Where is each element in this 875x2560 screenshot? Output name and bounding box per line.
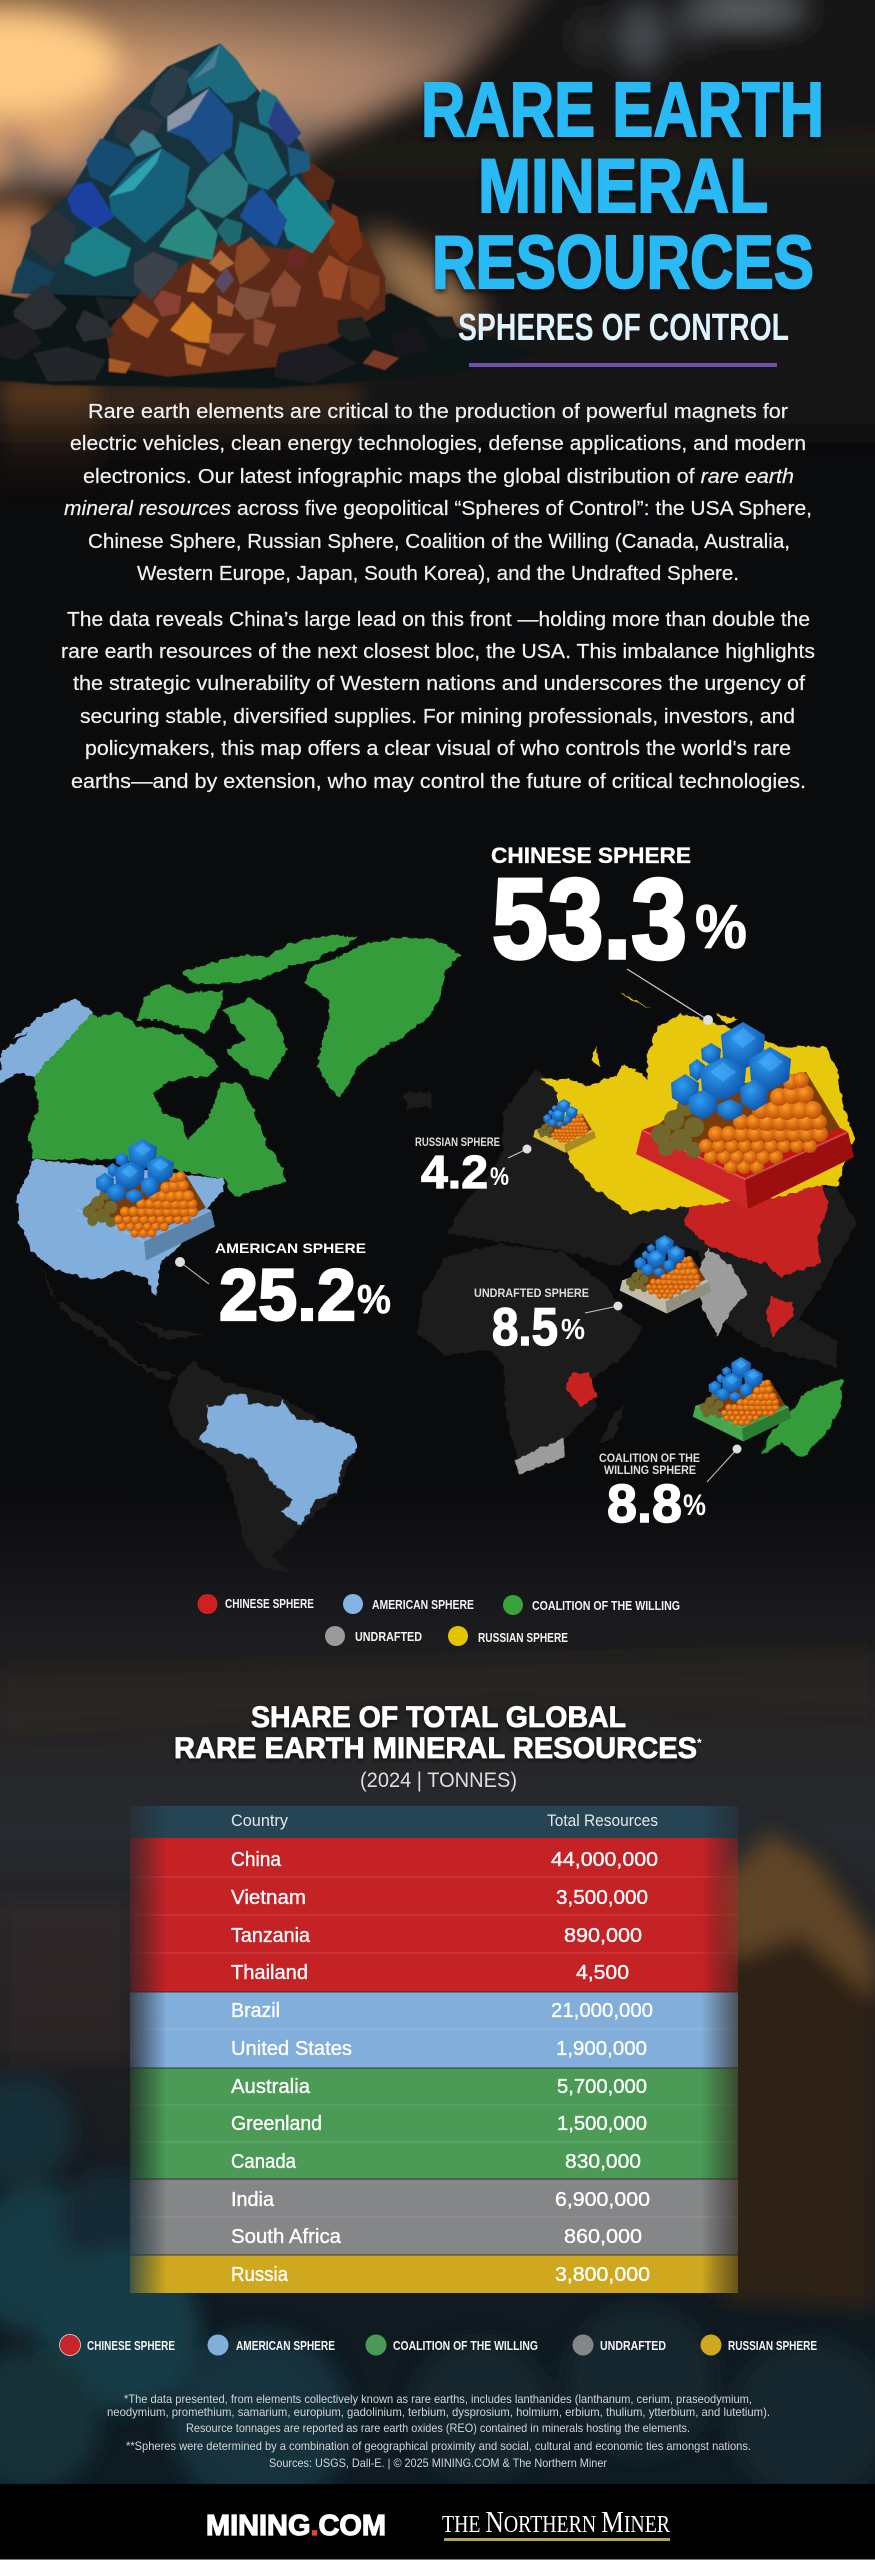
callout: undrafted sphere	[474, 1288, 622, 1357]
table rows: coalition sphere: Greenland	[231, 2113, 322, 2135]
table legend: CHINESE SPHERE	[87, 2339, 175, 2353]
intro paragraph: Western Europe, Japan, South Korea), and the Undrafted Sphere.	[137, 563, 739, 585]
callout: coalition sphere: WILLING SPHERE	[604, 1465, 696, 1477]
second paragraph: The data reveals China’s large lead on this front —holding more than double the	[67, 609, 810, 631]
table column headers: Country	[231, 1811, 288, 1830]
callout: undrafted sphere: 8.5	[492, 1298, 558, 1357]
logo: The Northern Miner: THE NORTHERN MINER	[442, 2504, 670, 2539]
callout: American sphere: %	[357, 1276, 391, 1322]
second paragraph	[61, 609, 815, 793]
table column headers: Total Resources	[547, 1811, 658, 1830]
callout: coalition sphere	[599, 1444, 742, 1534]
table rows: Chinese sphere: China	[231, 1849, 282, 1871]
footer band	[0, 2484, 875, 2560]
bottom edge line	[0, 2559, 875, 2560]
table rows: American sphere: 21,000,000	[551, 2000, 653, 2022]
callout: Chinese sphere: CHINESE SPHERE	[491, 843, 691, 868]
table rows: undrafted: India	[231, 2189, 275, 2211]
table rows: Chinese sphere: Thailand	[231, 1962, 308, 1984]
fade from hero into dark page	[0, 390, 875, 490]
table rows: Chinese sphere: Vietnam	[231, 1887, 306, 1909]
second paragraph: policymakers, this map offers a clear visual of who controls the world's rare	[85, 738, 791, 760]
callout: American sphere: AMERICAN SPHERE	[215, 1240, 366, 1256]
title	[421, 67, 824, 304]
table rows: American sphere	[231, 2000, 653, 2060]
map: American sphere land	[0, 998, 357, 1525]
callout: coalition sphere: 8.8	[607, 1474, 682, 1534]
table rows: coalition sphere: 5,700,000	[557, 2076, 647, 2098]
table rows: Chinese sphere	[231, 1849, 658, 1984]
table rows: Russian sphere: Russia	[231, 2264, 289, 2286]
subtitle underline	[469, 363, 777, 367]
table rows: undrafted	[231, 2189, 650, 2248]
table legend	[60, 2334, 817, 2356]
table rows: Chinese sphere: 4,500	[576, 1962, 629, 1984]
table rows: undrafted: 6,900,000	[555, 2189, 650, 2211]
mineral tray: Russian sphere	[533, 1099, 596, 1153]
table heading: RARE EARTH MINERAL RESOURCES	[174, 1732, 697, 1765]
mineral tray: Chinese sphere	[636, 1022, 854, 1209]
water reflection under rock pile	[0, 380, 360, 510]
map: Coalition of the Willing land	[28, 935, 843, 1457]
map: Chinese sphere land	[566, 1185, 829, 1406]
table rows: coalition sphere: Australia	[231, 2076, 311, 2098]
table column headers	[231, 1811, 658, 1830]
map: undrafted highlighted land	[516, 1248, 748, 1474]
callout: undrafted sphere: UNDRAFTED SPHERE	[474, 1288, 589, 1300]
table heading: *	[697, 1736, 702, 1750]
second paragraph: securing stable, diversified supplies. For mining professionals, investors, and	[80, 706, 795, 728]
table legend: RUSSIAN SPHERE	[728, 2339, 817, 2353]
map legend	[198, 1594, 680, 1646]
table rows: undrafted: 860,000	[564, 2226, 642, 2248]
table color bands	[130, 1806, 738, 2293]
footnotes and sources: neodymium, promethium, samarium, europium, gadolinium, terbium, dysprosium, holmium, erbium, thulium, ytterbium, and lutetium).	[107, 2405, 770, 2419]
logo: MINING.COM: MINING.COM	[206, 2510, 386, 2542]
lower page background with rocks	[0, 1500, 875, 2510]
footnotes and sources: **Spheres were determined by a combination of geographical proximity and social, cultural and economic ties amongst nations.	[126, 2439, 751, 2453]
callout: Chinese sphere	[491, 843, 747, 1025]
intro paragraph	[64, 401, 812, 585]
world map base: undrafted land	[39, 1068, 857, 1573]
table rows: coalition sphere: 1,500,000	[557, 2113, 647, 2135]
intro paragraph: Chinese Sphere, Russian Sphere, Coalition of the Willing (Canada, Australia,	[88, 531, 790, 553]
mineral tray: undrafted sphere	[620, 1235, 711, 1314]
table heading: SHARE OF TOTAL GLOBAL	[251, 1701, 626, 1734]
table rows: American sphere: United States	[231, 2038, 352, 2060]
table legend: COALITION OF THE WILLING	[393, 2339, 538, 2353]
map legend: COALITION OF THE WILLING	[532, 1598, 680, 1613]
callout: American sphere	[175, 1240, 391, 1336]
map legend: CHINESE SPHERE	[225, 1596, 314, 1611]
table rows: coalition sphere: 830,000	[565, 2151, 641, 2173]
intro paragraph: Rare earth elements are critical to the production of powerful magnets for	[88, 401, 788, 423]
table rows: Chinese sphere: Tanzania	[231, 1925, 311, 1947]
hero background: blurred sunset, mountains and water	[0, 0, 875, 433]
mineral tray: coalition sphere	[693, 1357, 791, 1442]
table rows: Russian sphere: 3,800,000	[555, 2264, 650, 2286]
callout: coalition sphere: %	[683, 1489, 706, 1522]
callout: undrafted sphere: %	[561, 1314, 585, 1346]
footnotes and sources	[107, 2392, 770, 2470]
callout: American sphere: 25.2	[219, 1255, 356, 1336]
table rows: coalition sphere	[231, 2076, 647, 2173]
title: MINERAL	[478, 144, 768, 229]
map: Russian sphere land	[541, 992, 854, 1213]
map legend: RUSSIAN SPHERE	[478, 1630, 568, 1645]
table rows: coalition sphere: Canada	[231, 2151, 297, 2173]
footnotes and sources: *The data presented, from elements collectively known as rare earths, includes lanthanides (lanthanum, cerium, praseodymium,	[124, 2392, 752, 2406]
table subheading: (2024 | TONNES)	[360, 1769, 517, 1792]
second paragraph: rare earth resources of the next closest bloc, the USA. This imbalance highlights	[61, 641, 815, 663]
callout: coalition sphere: COALITION OF THE	[599, 1453, 700, 1465]
map legend: UNDRAFTED	[355, 1629, 422, 1644]
table rows: undrafted: South Africa	[231, 2226, 342, 2248]
hero illustration: mineral pile	[0, 43, 536, 388]
map legend: AMERICAN SPHERE	[372, 1597, 474, 1612]
mineral tray: American sphere	[73, 1139, 215, 1261]
callout: Russian sphere	[415, 1137, 532, 1198]
callout: Chinese sphere: 53.3	[492, 856, 687, 983]
table rows: American sphere: Brazil	[231, 2000, 280, 2022]
footnotes and sources: Resource tonnages are reported as rare earth oxides (REO) contained in minerals hosting the elements.	[186, 2421, 690, 2435]
table rows: Russian sphere	[231, 2264, 650, 2286]
callout: Russian sphere: 4.2	[421, 1146, 488, 1198]
intro paragraph: electric vehicles, clean energy technologies, defense applications, and modern	[70, 433, 806, 455]
table heading	[174, 1701, 702, 1765]
footnotes and sources: Sources: USGS, Dall-E. | © 2025 MINING.COM & The Northern Miner	[269, 2456, 607, 2470]
intro paragraph: mineral resources across five geopolitical “Spheres of Control”: the USA Sphere,	[64, 498, 812, 520]
callout: Russian sphere: RUSSIAN SPHERE	[415, 1137, 500, 1149]
intro paragraph: electronics. Our latest infographic maps the global distribution of rare earth	[83, 466, 794, 488]
table legend: UNDRAFTED	[600, 2339, 666, 2353]
table rows: Chinese sphere: 3,500,000	[556, 1887, 648, 1909]
table legend: AMERICAN SPHERE	[236, 2339, 335, 2353]
second paragraph: earths—and by extension, who may control the future of critical technologies.	[71, 771, 806, 793]
table rows: Chinese sphere: 44,000,000	[551, 1849, 658, 1871]
table rows: Chinese sphere: 890,000	[564, 1925, 642, 1947]
callout: Russian sphere: %	[490, 1163, 509, 1191]
table rows: American sphere: 1,900,000	[556, 2038, 647, 2060]
callout: Chinese sphere: %	[695, 893, 747, 962]
second paragraph: the strategic vulnerability of Western nations and underscores the urgency of	[73, 673, 805, 695]
